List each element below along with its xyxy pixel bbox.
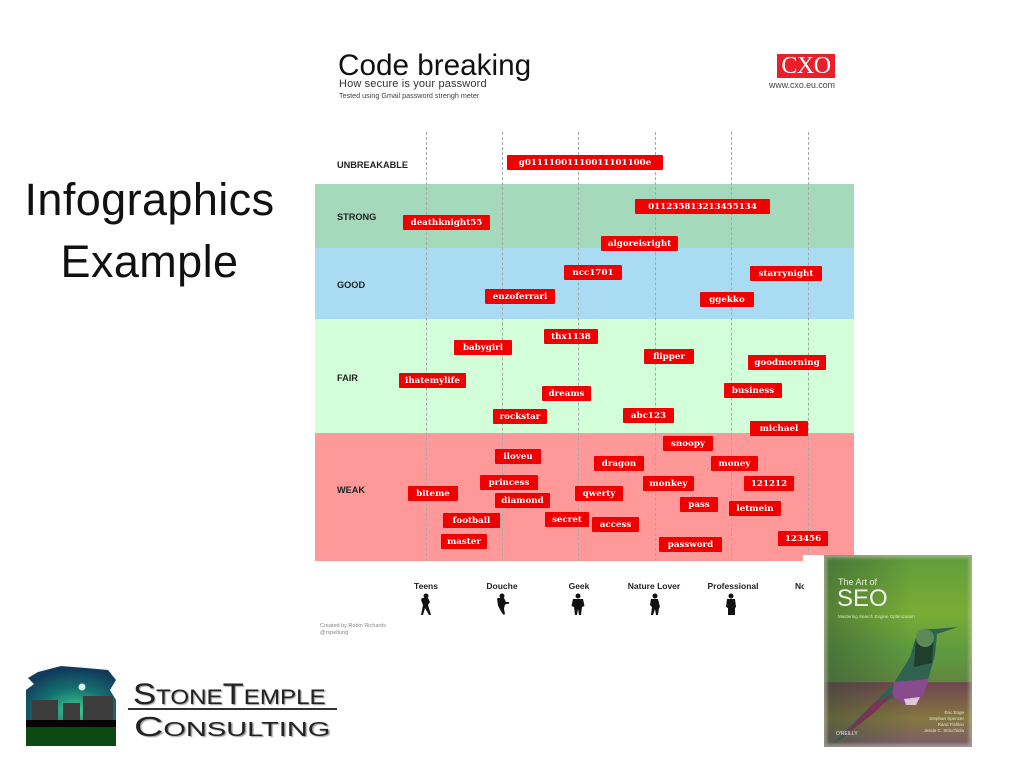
book authors	[923, 710, 964, 733]
password tags: ncc1701	[572, 268, 614, 278]
password tags: ggekko	[709, 295, 745, 305]
icon: professional	[726, 594, 736, 615]
book cover: The Art of SEO	[824, 555, 972, 747]
password tags: money	[719, 459, 750, 469]
book title SEO: SEO	[837, 585, 888, 612]
company name: consulting: Consulting	[134, 711, 330, 742]
slide title: Example	[61, 236, 238, 287]
password tags: 121212	[751, 479, 787, 489]
website address: www.cxo.eu.com	[769, 80, 835, 90]
slide title: Infographics	[25, 174, 274, 225]
slide title	[25, 174, 274, 287]
password tags: flipper	[653, 352, 685, 362]
label: unbreakable: UNBREAKABLE	[337, 160, 408, 170]
password tags: enzoferrari	[493, 292, 547, 302]
password tags: snoopy	[671, 439, 705, 449]
password tags: goodmorning	[754, 358, 820, 368]
label: good: GOOD	[337, 280, 365, 290]
password tags: g01111001110011101100e	[519, 158, 651, 168]
band: strong	[315, 184, 854, 248]
CXO logo: CXO	[781, 53, 831, 79]
password tags: biteme	[416, 489, 450, 499]
password tags: qwerty	[583, 489, 615, 499]
password tags: monkey	[650, 479, 687, 489]
illustration: hummingbird	[833, 627, 958, 743]
heading: code breaking: Code breaking	[338, 49, 531, 82]
subheading: How secure is your password	[339, 78, 487, 90]
logo divider	[128, 708, 337, 710]
category labels: Teens	[414, 581, 438, 591]
password tags: rockstar	[500, 412, 540, 422]
password tags: dragon	[602, 459, 636, 469]
password tags: iloveu	[503, 452, 533, 462]
label: fair: FAIR	[337, 373, 358, 383]
password tags: password	[668, 540, 713, 550]
icon: stonehenge logo image	[26, 666, 116, 746]
vertical dashed guide lines	[426, 132, 809, 561]
password tags: football	[453, 516, 490, 526]
icon: douche	[497, 594, 509, 614]
password tags: princess	[489, 478, 529, 488]
category labels: Nature Lover	[628, 581, 680, 591]
password tags: diamond	[501, 496, 544, 506]
password tags: thx1138	[551, 332, 591, 342]
book authors: Eric Enge	[944, 710, 964, 715]
credit: @rspeltung	[320, 630, 348, 636]
book authors: Stephan Spencer	[929, 716, 964, 721]
credit: Created by Robin Richards	[320, 623, 386, 629]
password tags	[399, 155, 828, 552]
category labels	[414, 581, 804, 591]
book authors: Jessie C. Stricchiola	[923, 728, 964, 733]
icon: nature lover	[650, 594, 660, 615]
book authors: Rand Fishkin	[938, 722, 964, 727]
password tags: starrynight	[759, 269, 813, 279]
company name: stonetemple: StoneTemple	[133, 678, 326, 711]
password tags: 123456	[785, 534, 821, 544]
password tags: access	[600, 520, 631, 530]
publisher: O'REILLY	[836, 731, 858, 737]
white backing behind book	[803, 555, 863, 575]
band: fair	[315, 319, 854, 433]
password tags: letmein	[736, 504, 774, 514]
icon: geek	[572, 594, 584, 615]
company logo text	[128, 678, 337, 742]
password tags: deathknight55	[411, 218, 482, 228]
label: weak: WEAK	[337, 485, 365, 495]
password tags: ihatemylife	[405, 376, 460, 386]
note: Tested using Gmail password strengh meter	[339, 91, 479, 100]
password tags: babygirl	[463, 343, 503, 353]
password tags: abc123	[631, 411, 666, 421]
password tags: business	[732, 386, 774, 396]
category labels: Douche	[486, 581, 518, 591]
credit	[320, 623, 386, 636]
band: weak	[315, 433, 854, 561]
password tags: master	[447, 537, 481, 547]
icons: person silhouettes	[421, 594, 736, 615]
password tags: secret	[552, 515, 582, 525]
band: good	[315, 248, 854, 319]
book title: The Art of	[838, 577, 877, 587]
icon: teen	[421, 594, 431, 615]
password tags: algoreisright	[608, 239, 671, 249]
panel: code breaking infographic	[338, 49, 835, 100]
category labels: Professional	[707, 581, 759, 591]
label: strong: STRONG	[337, 212, 376, 222]
password tags: michael	[760, 424, 798, 434]
password tags: dreams	[549, 389, 584, 399]
category labels: Geek	[569, 581, 589, 591]
book subtitle: Mastering Search Engine Optimization	[838, 614, 915, 619]
password tags: pass	[688, 500, 710, 510]
password tags: 011235813213455134	[648, 202, 757, 212]
